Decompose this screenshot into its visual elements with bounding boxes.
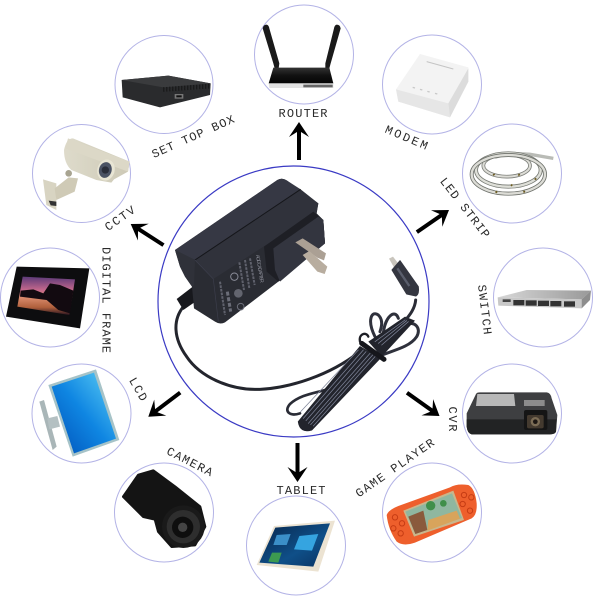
icon: dash camera — [467, 392, 557, 434]
label: camera: CAMERA — [164, 445, 216, 480]
label: CCTV: CCTV — [102, 203, 139, 235]
device circle: modem — [382, 35, 482, 134]
label: CVR: CVR — [445, 406, 459, 432]
label: LED strip: LED STRIP — [436, 175, 492, 241]
label: modem: MODEM — [383, 123, 430, 153]
icon: network switch — [498, 290, 591, 308]
device circle: CCTV — [32, 124, 130, 222]
device circle: set top box — [115, 36, 213, 134]
label: digital frame: DIGITAL FRAME — [98, 247, 112, 353]
icon: tablet — [257, 521, 335, 572]
arrow: to CCTV — [125, 216, 169, 254]
device circle: CVR dash camera — [462, 364, 562, 463]
icon: set top box — [122, 76, 211, 107]
arrow: to CVR — [401, 385, 445, 424]
rating marks — [220, 258, 255, 315]
icon: router — [263, 25, 341, 88]
adapter housing — [175, 179, 325, 324]
plug prongs — [295, 238, 326, 260]
device circle: router — [254, 5, 354, 104]
label: set top box: SET TOP BOX — [150, 113, 237, 162]
arrow: to tablet — [288, 443, 308, 482]
device circle: digital frame — [0, 248, 100, 347]
rating label text: AC/DC ADAPTER — [254, 254, 264, 284]
central circle outline — [158, 166, 429, 437]
label: LCD: LCD — [125, 375, 150, 404]
adapter body — [175, 179, 327, 324]
plug recess — [264, 212, 325, 282]
icon: LED strip — [472, 153, 553, 194]
icon: modem — [396, 54, 468, 117]
strain relief — [177, 282, 207, 310]
coiled cable bundle — [287, 300, 418, 431]
label: tablet: TABLET — [276, 484, 326, 498]
icon: LCD monitor — [39, 369, 119, 457]
arrow: to router — [289, 122, 309, 160]
label: switch: SWITCH — [474, 284, 494, 335]
device circle: LED strip — [462, 124, 562, 223]
device circle: LCD monitor — [32, 364, 131, 463]
device circle: game player — [382, 463, 482, 562]
icon: digital photo frame — [6, 267, 89, 328]
icon: CCTV camera — [43, 138, 130, 210]
cable — [176, 307, 358, 389]
arrow: to LCD — [142, 385, 186, 425]
device circle: switch — [494, 248, 592, 347]
device circle: camera — [114, 463, 214, 562]
DC barrel connector — [389, 257, 419, 296]
device circle: tablet — [246, 496, 346, 595]
label: game player: GAME PLAYER — [353, 436, 437, 501]
icon: handheld game player — [387, 485, 477, 544]
label: router: ROUTER — [278, 107, 328, 121]
power adapter with cable — [175, 179, 419, 431]
arrow: to LED strip — [411, 202, 455, 240]
icon: camera — [123, 471, 205, 548]
